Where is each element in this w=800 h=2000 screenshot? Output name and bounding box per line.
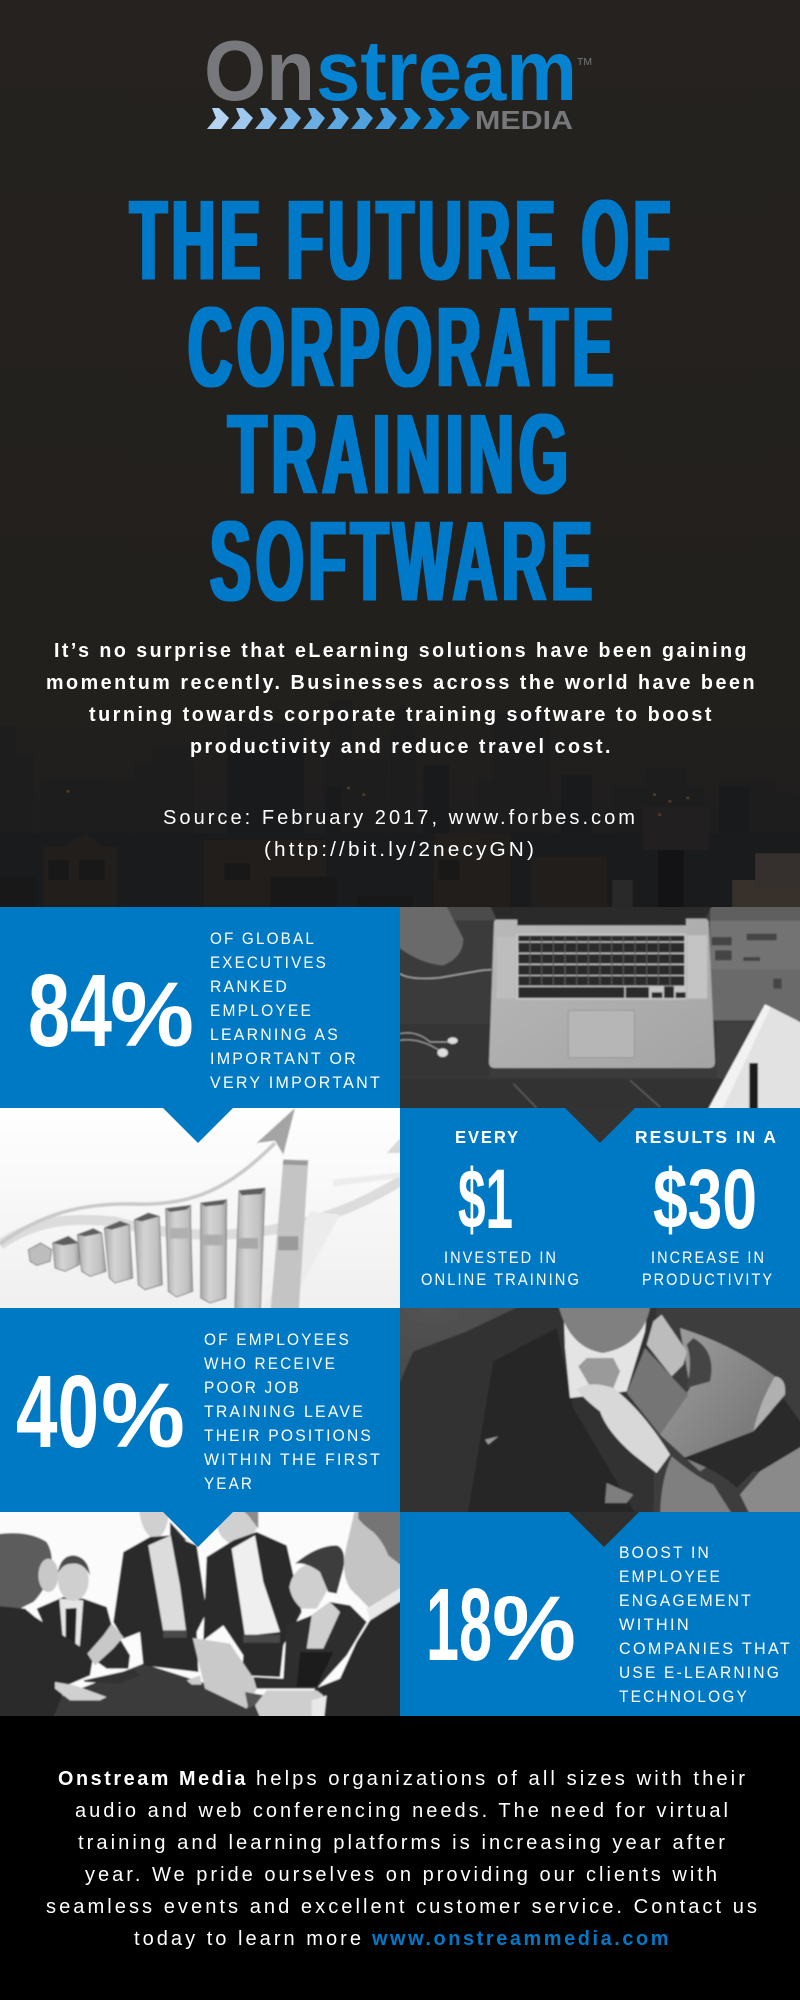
text: every $1 invested: EVERY [455,1127,520,1147]
stat description: YEAR [204,1474,254,1493]
pointer: row 1 left blue arrow [163,1108,233,1143]
stat description: IMPORTANT OR [210,1049,358,1068]
text: every $1 invested: INVESTED IN [444,1248,558,1267]
logo: Onstream Media [204,24,592,135]
photo: business team meeting [0,1512,400,1716]
pointer: row 3 left blue arrow [163,1512,233,1547]
stat description: RANKED [210,977,289,996]
text: results in a $30 increase: RESULTS IN A [635,1127,778,1147]
footer text [46,1768,760,1950]
logo wordmark gray part: On [204,24,315,119]
stat description: EMPLOYEE [210,1001,313,1020]
pointer: row 3 right photo arrow [569,1512,639,1547]
photo: laptop on wooden desk [400,907,800,1108]
stat description: OF GLOBAL [210,929,316,948]
panel: $1 to $30 return [400,1108,800,1308]
footer line 6: today to learn more [134,1928,364,1950]
stat number 84%: 84 [28,953,112,1068]
stat number 40% [16,1354,185,1469]
panel: 84% stat [0,907,400,1108]
stat description: ENGAGEMENT [619,1591,753,1610]
stat description: COMPANIES THAT [619,1639,792,1658]
footer website link: www.onstreammedia.com [371,1928,671,1950]
stat description: BOOST IN [619,1543,711,1562]
source citation [163,807,638,861]
logo MEDIA label: MEDIA [475,105,573,135]
stat number 18%: % [492,1578,576,1680]
photo: man adjusting tie [400,1308,800,1512]
panel: footer [0,1716,800,2000]
panel: 40% stat [0,1308,400,1512]
footer company name: Onstream Media [58,1768,248,1790]
text: every $1 invested: ONLINE TRAINING [421,1270,581,1289]
stat description [210,929,382,1092]
stat description: EXECUTIVES [210,953,328,972]
logo wordmark blue part: stream [316,24,577,119]
stat description: WITHIN THE FIRST [204,1450,382,1469]
stat description: WITHIN [619,1615,691,1634]
footer line 4: year. We pride ourselves on providing our clients with [85,1864,720,1886]
stat description: THEIR POSITIONS [204,1426,373,1445]
city skyline background [0,700,800,907]
stat description: TECHNOLOGY [619,1687,749,1706]
stat description: LEARNING AS [210,1025,340,1044]
text: results in a $30 increase [635,1127,778,1289]
text: every $1 invested [421,1127,581,1289]
logo chevrons [207,108,470,129]
stat description [619,1543,792,1706]
panel: 18% stat [400,1512,800,1716]
pointer: row 1 right photo arrow [565,1108,635,1143]
intro paragraph [46,639,757,758]
stat number 18%: 18 [426,1567,492,1682]
stat description: VERY IMPORTANT [210,1073,382,1092]
text: every $1 invested: $1 [458,1152,513,1246]
intro paragraph: It’s no surprise that eLearning solutions have been gaining [54,639,749,662]
photo: glass bar chart with arrow [0,1108,400,1308]
footer line 3: training and learning platforms is increasing year after [78,1832,728,1854]
footer line 5: seamless events and excellent customer service. Contact us [46,1896,760,1918]
stat number 84%: % [110,964,194,1066]
stat number 40%: % [101,1365,185,1467]
footer line 2: audio and web conferencing needs. The need for virtual [75,1800,731,1822]
intro paragraph: turning towards corporate training software to boost [89,703,714,726]
title [130,178,675,626]
stat description [204,1330,382,1493]
source citation: (http://bit.ly/2necyGN) [264,839,537,861]
footer line 1: helps organizations of all sizes with their [256,1768,748,1790]
stat description: WHO RECEIVE [204,1354,337,1373]
stat description: USE E-LEARNING [619,1663,781,1682]
stat number 84% [28,953,194,1068]
intro paragraph: momentum recently. Businesses across the world have been [46,671,757,694]
stat description: EMPLOYEE [619,1567,722,1586]
source citation: Source: February 2017, www.forbes.com [163,807,638,829]
text: results in a $30 increase: PRODUCTIVITY [642,1270,774,1289]
stat description: OF EMPLOYEES [204,1330,351,1349]
intro paragraph: productivity and reduce travel cost. [190,735,613,758]
text: results in a $30 increase: INCREASE IN [651,1248,766,1267]
panel: dark header background [0,0,800,907]
stat number 40%: 40 [16,1354,99,1469]
stat description: TRAINING LEAVE [204,1402,365,1421]
stat description: POOR JOB [204,1378,301,1397]
logo trademark: TM [577,57,592,68]
text: results in a $30 increase: $30 [653,1152,757,1246]
